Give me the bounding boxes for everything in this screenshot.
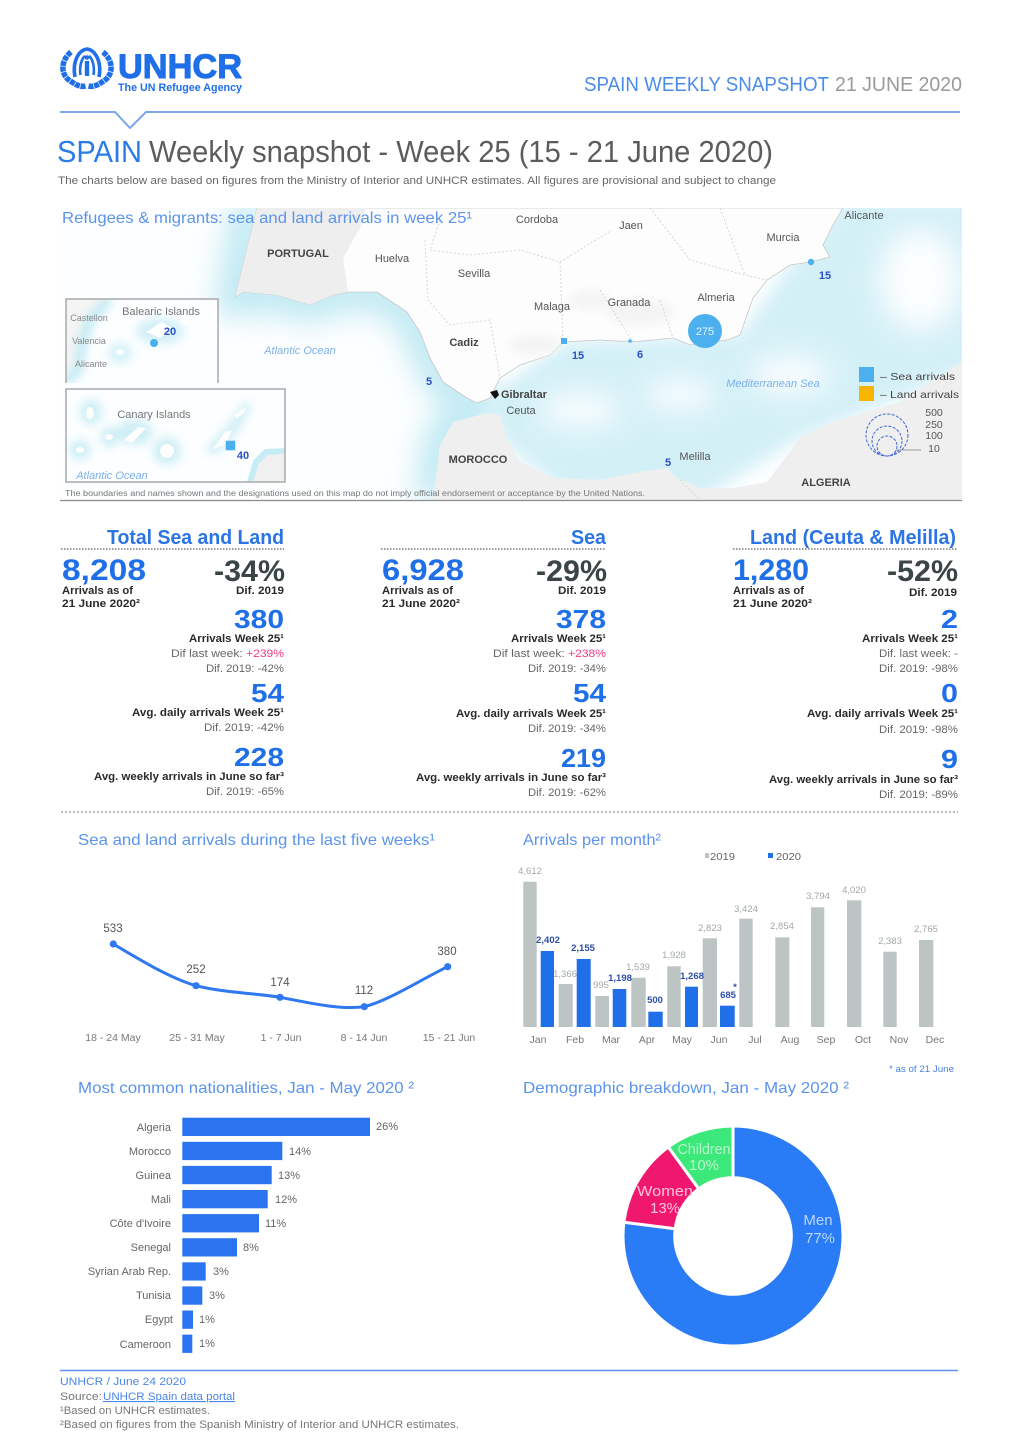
chart legend: 2019 — [710, 851, 735, 863]
bar chart: arrivals per month: 1,539 — [626, 962, 650, 973]
inset: Balearic Islands — [66, 299, 218, 383]
map labels: places: Melilla — [679, 451, 711, 463]
map legend — [859, 367, 959, 456]
weekly arrivals: Dif. 2019: -34% — [528, 663, 606, 675]
daily average: Dif. 2019: -34% — [528, 723, 606, 735]
footer: sources and notes: ¹Based on UNHCR estimates. — [60, 1405, 210, 1417]
line chart: arrivals last five weeks: 252 — [186, 964, 206, 976]
bar chart: arrivals per month — [518, 851, 954, 1074]
weekly arrivals: 378 — [556, 604, 606, 634]
bar chart: nationalities: Egypt — [145, 1314, 173, 1326]
map legend: 250 — [925, 419, 943, 431]
total arrivals: 21 June 2020² — [733, 598, 812, 610]
donut chart: demographics: 10% — [689, 1157, 719, 1174]
daily average: Avg. daily arrivals Week 25¹ — [807, 708, 958, 720]
map labels: places: Sevilla — [458, 268, 491, 280]
donut chart: demographics — [623, 1126, 843, 1346]
map labels: places: ALGERIA — [801, 477, 851, 489]
difference from 2019: Dif. 2019 — [236, 585, 284, 597]
footer: sources and notes: ²Based on figures from the Spanish Ministry of Interior and UNHCR estimates. — [60, 1419, 459, 1431]
inset: Canary Islands: Atlantic Ocean — [75, 470, 148, 482]
map labels: places: Almeria — [697, 292, 736, 304]
panel: land stats — [733, 527, 958, 801]
map legend: – Land arrivals — [880, 389, 959, 401]
difference from 2019: -29% — [536, 555, 607, 588]
daily average: Dif. 2019: -42% — [204, 722, 284, 734]
daily average: Dif. 2019: -98% — [879, 724, 958, 736]
weekly arrivals: Dif last week: +239% — [171, 648, 284, 660]
bar chart: arrivals per month: 2,765 — [914, 924, 938, 935]
map labels: places: Atlantic Ocean — [263, 345, 336, 357]
map labels: places: Jaen — [619, 220, 643, 232]
weekly arrivals: Dif last week: +238% — [493, 648, 606, 660]
map title: Refugees & migrants: sea and land arrivals in week 25¹ — [62, 210, 472, 227]
total arrivals: Arrivals as of — [62, 585, 133, 597]
difference from 2019: -34% — [214, 555, 285, 588]
bar chart: arrivals per month: Feb — [566, 1034, 584, 1046]
map labels: places: PORTUGAL — [267, 248, 329, 260]
bar chart: arrivals per month: Jan — [530, 1034, 547, 1046]
chart legend: 2020 — [776, 851, 801, 863]
heading: Total Sea and Land — [107, 527, 284, 549]
map labels: places: Alicante — [844, 210, 884, 222]
bar chart: nationalities: 3% — [213, 1266, 229, 1278]
bar chart: nationalities: 11% — [265, 1218, 286, 1230]
footer: sources and notes: UNHCR Spain data portal — [103, 1391, 235, 1403]
bar chart: nationalities: Guinea — [136, 1170, 172, 1182]
subtitle: The charts below are based on figures from the Ministry of Interior and UNHCR estimates. All figures are provisional and subject to change — [58, 175, 776, 187]
inset: Canary Islands: Canary Islands — [117, 409, 191, 421]
heading: arrivals per month: Arrivals per month² — [523, 832, 662, 849]
weekly arrivals — [862, 604, 958, 675]
total arrivals: 21 June 2020² — [382, 598, 460, 610]
bar chart: nationalities: Tunisia — [136, 1290, 172, 1302]
heading: nationalities: Most common nationalities, Jan - May 2020 ² — [78, 1080, 415, 1097]
weekly average — [94, 742, 284, 798]
map labels: places: Cadiz — [449, 337, 479, 349]
line chart: arrivals last five weeks: 25 - 31 May — [169, 1032, 225, 1044]
icon: Gibraltar marker — [490, 390, 499, 399]
map labels: places: Murcia — [766, 232, 800, 244]
inset: Canary Islands — [66, 389, 285, 482]
line chart: arrivals last five weeks: 112 — [355, 985, 373, 997]
bar chart: arrivals per month: 4,020 — [842, 885, 866, 896]
total arrivals: 6,928 — [382, 554, 464, 587]
Mediterranean tint — [492, 208, 962, 488]
weekly average: Dif. 2019: -89% — [879, 789, 958, 801]
map data points: 5 — [426, 376, 432, 388]
bar chart: arrivals per month: Sep — [817, 1034, 835, 1046]
coastal glow — [235, 205, 490, 500]
weekly average: 219 — [561, 743, 606, 773]
bar chart: nationalities: Senegal — [131, 1242, 171, 1254]
map data points: 15 — [819, 270, 831, 282]
bar chart: nationalities: 8% — [243, 1242, 259, 1254]
bar chart: nationalities: 12% — [275, 1194, 297, 1206]
panel: map of sea and land arrivals — [60, 200, 990, 500]
daily average: 54 — [573, 678, 607, 708]
bar chart: nationalities: 3% — [209, 1290, 225, 1302]
bar chart: nationalities: 13% — [278, 1170, 300, 1182]
map labels: places: Gibraltar — [501, 389, 548, 401]
line chart: arrivals last five weeks: 380 — [437, 946, 457, 958]
donut chart: demographics: Men — [803, 1212, 833, 1229]
footer: sources and notes: UNHCR / June 24 2020 — [60, 1376, 186, 1388]
line chart: arrivals last five weeks — [85, 923, 475, 1044]
bar chart: nationalities: Syrian Arab Rep. — [88, 1266, 171, 1278]
bar chart: nationalities: 1% — [199, 1338, 215, 1350]
weekly average: Dif. 2019: -65% — [206, 786, 284, 798]
daily average: Avg. daily arrivals Week 25¹ — [132, 707, 284, 719]
inset: Balearic Islands: Castellon — [70, 313, 108, 323]
line chart: arrivals last five weeks: 174 — [270, 977, 290, 989]
weekly arrivals: Arrivals Week 25¹ — [189, 633, 284, 645]
title: SPAIN — [57, 134, 142, 169]
weekly average: 228 — [234, 742, 284, 772]
heading: demographic breakdown: Demographic breakdown, Jan - May 2020 ² — [523, 1080, 850, 1097]
bar chart: nationalities: Mali — [151, 1194, 171, 1206]
line chart: arrivals last five weeks: 533 — [103, 923, 123, 935]
panel: sea stats — [381, 527, 607, 799]
inset: Balearic Islands: Valencia — [72, 336, 106, 346]
total arrivals — [733, 554, 812, 610]
weekly arrivals: 380 — [234, 604, 284, 634]
donut chart: demographics: 13% — [650, 1200, 680, 1217]
inset: Canary Islands: 40 — [237, 450, 249, 462]
bar chart: arrivals per month: 3,424 — [734, 904, 758, 915]
map labels: places: Cordoba — [516, 214, 559, 226]
bar chart: nationalities: Cameroon — [120, 1339, 171, 1351]
bar chart: arrivals per month: Oct — [855, 1034, 871, 1046]
land: Spain — [235, 208, 843, 403]
map labels: places: Huelva — [375, 253, 410, 265]
bar chart: arrivals per month: Jul — [748, 1034, 762, 1046]
map labels: places: Malaga — [534, 301, 571, 313]
bar chart: arrivals per month: 4,612 — [518, 866, 542, 877]
map legend: – Sea arrivals — [880, 371, 955, 383]
header: report label: SPAIN WEEKLY SNAPSHOT — [584, 74, 829, 96]
header: report label: 21 JUNE 2020 — [835, 74, 962, 96]
weekly average: 9 — [941, 744, 958, 774]
map data points: 5 — [665, 457, 671, 469]
land: North Africa — [433, 362, 962, 500]
difference from 2019: Dif. 2019 — [558, 585, 606, 597]
total arrivals — [382, 554, 464, 610]
bar chart: arrivals per month: 2,402 — [536, 935, 560, 946]
title: Weekly snapshot - Week 25 (15 - 21 June 2020) — [149, 134, 773, 169]
weekly arrivals: Dif. 2019: -42% — [206, 663, 284, 675]
weekly arrivals: Arrivals Week 25¹ — [511, 633, 606, 645]
bar chart: nationalities: Algeria — [137, 1122, 172, 1134]
line chart: arrivals last five weeks: 18 - 24 May — [85, 1032, 141, 1044]
footer: sources and notes: Source: — [60, 1391, 102, 1403]
bar chart: nationalities: Côte d'Ivoire — [110, 1218, 171, 1230]
total arrivals — [62, 554, 146, 610]
land: Portugal — [235, 208, 366, 305]
weekly arrivals: 2 — [941, 604, 958, 634]
bar chart: arrivals per month: 995 — [593, 980, 609, 991]
daily average — [132, 678, 285, 734]
heading: five weeks chart: Sea and land arrivals during the last five weeks¹ — [78, 832, 435, 849]
donut chart: demographics: 77% — [805, 1230, 835, 1247]
weekly average: Avg. weekly arrivals in June so far³ — [769, 774, 958, 786]
logo: UNHCR — [63, 48, 243, 94]
logo wordmark: UNHCR — [118, 48, 242, 86]
bar chart: arrivals per month: Nov — [890, 1034, 909, 1046]
map data points — [426, 259, 831, 469]
heading: Sea — [571, 527, 607, 549]
bar chart: arrivals per month: May — [672, 1034, 693, 1046]
terrain shading — [521, 296, 664, 359]
total arrivals: 8,208 — [62, 554, 146, 587]
line chart: arrivals last five weeks: 1 - 7 Jun — [261, 1032, 302, 1044]
total arrivals: Arrivals as of — [733, 585, 804, 597]
panel: total sea and land stats — [61, 527, 285, 798]
bar chart: arrivals per month: 1,198 — [608, 973, 632, 984]
bar chart: nationalities: Morocco — [129, 1146, 171, 1158]
bar chart: arrivals per month: 3,794 — [806, 891, 830, 902]
weekly arrivals — [171, 604, 284, 675]
donut chart: demographics: Children — [678, 1141, 730, 1158]
map labels: places: Mediterranean Sea — [726, 378, 820, 390]
footer: sources and notes — [60, 1376, 459, 1431]
bar chart: arrivals per month: 1,928 — [662, 950, 686, 961]
weekly average — [769, 744, 958, 801]
difference from 2019: -52% — [887, 555, 958, 588]
header: report label — [584, 74, 962, 96]
chart legend — [705, 851, 801, 863]
inset: Balearic Islands: Balearic Islands — [122, 306, 200, 318]
bar chart: nationalities — [88, 1118, 398, 1353]
bar chart: nationalities: 1% — [199, 1314, 215, 1326]
daily average: 0 — [941, 678, 958, 708]
weekly arrivals — [493, 604, 606, 675]
weekly arrivals: Dif. 2019: -98% — [879, 663, 958, 675]
map legend: 100 — [925, 430, 943, 442]
province borders — [425, 208, 767, 500]
bar chart: arrivals per month: 2,823 — [698, 923, 722, 934]
map labels: places: MOROCCO — [449, 454, 508, 466]
bar chart: arrivals per month: 685 — [720, 990, 737, 1001]
bar chart: arrivals per month: Dec — [926, 1034, 944, 1046]
bar chart: arrivals per month: 2,854 — [770, 921, 794, 932]
bar chart: arrivals per month: Apr — [639, 1034, 656, 1046]
map labels: places: Ceuta — [506, 405, 537, 417]
bar chart: arrivals per month: Mar — [602, 1034, 621, 1046]
weekly average — [416, 743, 606, 799]
bar chart: arrivals per month: * — [733, 982, 737, 993]
bar chart: arrivals per month: 500 — [647, 995, 663, 1006]
chart note: * as of 21 June — [889, 1064, 954, 1074]
weekly average: Avg. weekly arrivals in June so far³ — [94, 771, 284, 783]
map data points: 275 — [696, 326, 714, 338]
daily average: 54 — [251, 678, 285, 708]
line chart: arrivals last five weeks: 8 - 14 Jun — [341, 1032, 388, 1044]
weekly average: Dif. 2019: -62% — [528, 787, 606, 799]
map data points: 15 — [572, 350, 584, 362]
daily average — [456, 678, 607, 735]
map data points: 6 — [637, 349, 643, 361]
line chart: arrivals last five weeks: 15 - 21 Jun — [423, 1032, 475, 1044]
bar chart: nationalities: 26% — [376, 1121, 398, 1133]
inset: Balearic Islands: 20 — [164, 326, 176, 338]
difference from 2019: Dif. 2019 — [909, 587, 957, 599]
bar chart: arrivals per month: 2,383 — [878, 936, 902, 947]
bar chart: arrivals per month: Aug — [781, 1034, 799, 1046]
total arrivals: Arrivals as of — [382, 585, 453, 597]
total arrivals: 21 June 2020² — [62, 598, 140, 610]
weekly arrivals: Arrivals Week 25¹ — [862, 633, 958, 645]
bar chart: nationalities: 14% — [289, 1146, 311, 1158]
icon: UNHCR emblem — [63, 49, 111, 86]
daily average — [807, 678, 958, 736]
donut chart: demographics: Women — [637, 1183, 693, 1200]
heading: Land (Ceuta & Melilla) — [750, 527, 956, 549]
bar chart: arrivals per month: 2,155 — [571, 943, 596, 954]
map disclaimer: The boundaries and names shown and the designations used on this map do not imply official endorsement or acceptance by the United Nations. — [65, 489, 645, 498]
bar chart: arrivals per month: Jun — [711, 1034, 728, 1046]
logo tagline: The UN Refugee Agency — [118, 82, 243, 94]
bar chart: arrivals per month: 1,366 — [553, 969, 577, 980]
weekly arrivals: Dif. last week: - — [879, 648, 958, 660]
total arrivals: 1,280 — [733, 554, 809, 587]
inset: Balearic Islands: Alicante — [75, 359, 107, 369]
map labels: places — [263, 210, 884, 489]
map legend: 500 — [925, 407, 943, 419]
map labels: places: Granada — [608, 297, 651, 309]
daily average: Avg. daily arrivals Week 25¹ — [456, 708, 606, 720]
weekly average: Avg. weekly arrivals in June so far³ — [416, 772, 606, 784]
map legend: 10 — [928, 443, 940, 455]
bar chart: arrivals per month: 1,268 — [680, 971, 704, 982]
